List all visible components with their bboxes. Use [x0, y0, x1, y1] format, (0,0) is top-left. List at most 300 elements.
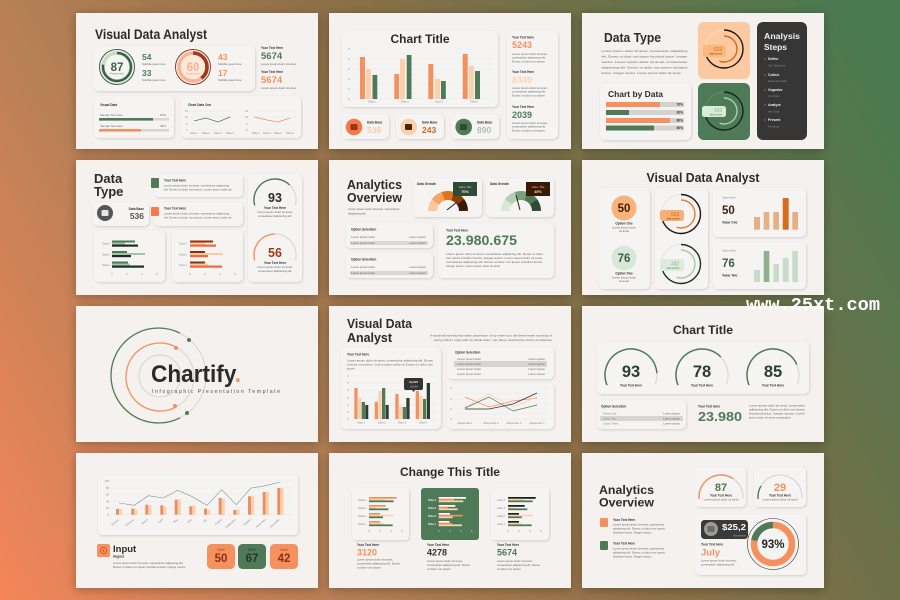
ring chart 60	[176, 50, 210, 84]
stats orange: Subtitle goes here	[218, 62, 242, 66]
dark value pill: $25,2	[722, 522, 746, 532]
gauge card 87: 87	[715, 482, 727, 494]
grouped bar chart: ut dolor non ipsum. Lorem ipsum dolor sit. Donec ut dolor non	[347, 362, 433, 366]
line charts: 15	[245, 109, 248, 113]
slide 4: Data Type gauges	[76, 160, 318, 295]
input text: Lorem ipsum dolor sit amet, consectetur adipiscing elit.	[113, 561, 184, 565]
gauge 85: Your Text Here	[762, 384, 784, 388]
value one bar card	[713, 188, 806, 237]
gauge 85	[739, 341, 807, 409]
donut chart 93%	[748, 518, 798, 570]
combo chart: March	[141, 517, 149, 525]
progress bars: 54%	[160, 124, 166, 128]
list item green	[600, 541, 665, 558]
slide 1: Visual Data Analyst	[76, 13, 318, 149]
panel: green bars	[94, 230, 165, 282]
combo chart: April	[157, 517, 164, 524]
grouped bar chart: 3	[347, 396, 349, 400]
grouped bar chart: Lorem ipsum dolor sit amet, consectetur adipiscing elit. Donec	[347, 358, 434, 362]
stat 2039: 2039	[512, 110, 532, 120]
option table: Option Selection	[601, 404, 626, 408]
july text: consectetur adipiscing elit.	[701, 562, 735, 566]
stat 4278: ut dolor non ipsum	[427, 567, 451, 571]
side numbers: 5674	[261, 51, 283, 62]
panel: analysis steps: the Objective	[768, 64, 786, 68]
orange horizontal bars: Data 3	[179, 242, 188, 246]
input text	[113, 544, 186, 569]
bar chart: 3	[348, 67, 350, 71]
paragraph: adipiscing elit. Donec ut dolor non ipsum tincidunt	[602, 66, 688, 70]
grouped bar chart: Data 3	[398, 420, 406, 424]
side numbers: Lorem ipsum dolor sit amet	[261, 86, 296, 90]
stats orange: 17	[218, 68, 228, 78]
option table: Lorem ipsum	[528, 372, 546, 376]
panel: green ring 342: data income	[709, 114, 723, 116]
stat 5243: Your Text Here	[512, 36, 534, 40]
panel: grouped bars	[341, 347, 441, 429]
panel: analysis steps: the Data	[768, 94, 780, 98]
value one bar card: Value One	[722, 220, 738, 224]
tile option 67: 67	[246, 553, 258, 565]
line chart: Responder 2	[484, 421, 499, 425]
stat 5674: Your Text Here	[497, 543, 519, 547]
stat card 243: Data Base	[422, 120, 438, 124]
slide 7: Chartify cover	[76, 306, 318, 442]
option table: Option One	[603, 412, 617, 416]
text card orange: Your Text Here	[164, 206, 186, 210]
option table: Lorem ipsum	[528, 367, 546, 371]
stats orange	[218, 52, 242, 82]
horizontal percent bars: 30%	[677, 110, 683, 114]
panel: peach ring 523: 523	[714, 47, 722, 53]
panel: orange bars	[172, 230, 243, 282]
panel: analysis steps: Relevant Data	[768, 79, 787, 83]
bar chart	[348, 47, 494, 104]
main number card: 23.980.675	[446, 233, 518, 248]
stat 5674: Lorem ipsum dolor sit amet,	[497, 559, 533, 563]
stat 2039	[512, 105, 548, 132]
heading: Lorem ipsum dolor sit amet, consectetur	[348, 207, 399, 211]
side paragraph	[749, 404, 806, 420]
text card green: Your Text Here	[164, 178, 186, 182]
stat 8349: Donec ut dolor non ipsum	[512, 93, 546, 97]
stat 2039: consectetur adipiscing elit.	[512, 125, 546, 129]
gauge card 29: Your Text Here	[769, 494, 791, 498]
bar card solid green: 0	[438, 529, 440, 533]
option card 1: Lorem ipsum dolor	[351, 241, 375, 245]
tile option 42: Option	[280, 548, 289, 552]
bar card orange green: 6	[401, 529, 403, 533]
bar chart: 5	[348, 47, 350, 51]
cover title: Chartify.	[151, 361, 241, 388]
stat card 243: 243	[422, 125, 436, 135]
stat card 536: 536	[130, 211, 144, 221]
list item green: Your Text Here	[613, 542, 635, 546]
panel: respondent rings	[93, 46, 255, 91]
heading: Overview	[599, 496, 655, 510]
panel: visual data bars	[94, 96, 174, 138]
gauge card orange: Data Growth	[417, 182, 436, 186]
main number card: Integer auctor. Lorem ipsum dolor sit amet	[446, 264, 500, 268]
stat 4278: consectetur adipiscing elit. Donec	[427, 563, 471, 567]
gauge card green: Value Title	[532, 185, 545, 189]
heading: Analytics	[599, 483, 654, 497]
horizontal percent bars	[606, 90, 684, 130]
bar card dark: Data 4	[497, 498, 506, 502]
gauge 56: 56	[268, 246, 282, 260]
intro text: A wonderful serenity has taken possession of my entire soul, like these sweet mornings of	[430, 334, 552, 338]
line charts: Data 4	[286, 131, 294, 135]
slide 11: Change This Title	[329, 453, 571, 588]
bar card orange green	[352, 488, 409, 540]
stats green: 33	[142, 68, 152, 78]
heading: Chart Title	[673, 325, 733, 337]
stat card 536	[342, 114, 389, 139]
horizontal percent bars: 80%	[677, 118, 683, 122]
line chart: 0	[450, 417, 452, 421]
stat 3120: Lorem ipsum dolor sit amet,	[357, 558, 393, 562]
line charts: 5	[246, 122, 248, 126]
option card 1	[346, 223, 433, 248]
stat 4278: Lorem ipsum dolor sit amet,	[427, 559, 463, 563]
option card 1: Lorem ipsum dolor	[351, 235, 375, 239]
stat 2039: Lorem ipsum dolor sit amet,	[512, 121, 548, 125]
tile option 50: Option	[217, 548, 226, 552]
stat 3120: Your Text Here	[357, 543, 379, 547]
bar card solid green: 6	[471, 529, 473, 533]
side paragraph: tincidunt luctus. Integer auctor. Lorem	[749, 412, 806, 416]
stat 8349: Lorem ipsum dolor sit amet,	[512, 86, 548, 90]
ring charts card: data income	[666, 267, 680, 270]
bar card orange green: Data 3	[358, 506, 367, 510]
stat card 890	[451, 114, 499, 139]
line charts: 0	[186, 128, 188, 132]
heading: Analytics	[347, 178, 402, 192]
combo chart: June	[186, 517, 193, 524]
list item orange: Lorem ipsum dolor sit amet, consectetur	[613, 522, 664, 526]
bar chart: 4	[348, 57, 350, 61]
progress bars: Sample Text Here	[100, 113, 123, 117]
line charts: 10	[185, 115, 188, 119]
line charts: 0	[246, 128, 248, 132]
stat 8349: 8349	[512, 75, 532, 85]
gauge card green: 45%	[534, 190, 542, 194]
gauge 93: Your Text Here	[620, 384, 642, 388]
stats green: Subtitle goes here	[142, 78, 166, 82]
option table: Option Three	[603, 422, 619, 426]
green horizontal bars: 0	[111, 272, 113, 276]
stat 4278: Your Text Here	[427, 543, 449, 547]
heading: Type	[94, 184, 123, 199]
intro text	[430, 334, 552, 342]
line charts: Data 2	[263, 131, 271, 135]
panel: peach ring 523: data income	[709, 52, 723, 56]
list item orange: tincidunt luctus. Integer auctor	[613, 530, 652, 534]
input text: August	[113, 554, 125, 558]
heading: Visual Data Analyst	[646, 171, 760, 185]
line charts: Chart Data One	[188, 103, 211, 107]
ring charts card: 523	[671, 212, 679, 218]
tooltip: Up105	[409, 380, 418, 384]
option table: Lorem ipsum	[528, 357, 546, 361]
bar card solid green	[421, 488, 479, 540]
stat 5243: Donec ut dolor non ipsum	[512, 59, 546, 63]
line chart: 6	[450, 386, 452, 390]
combo chart: 20	[106, 506, 110, 510]
stat 2039: Donec ut dolor non ipsum	[512, 128, 546, 132]
tile option 50: 50	[215, 553, 227, 565]
bar card dark: 4	[529, 529, 531, 533]
green horizontal bars: Data 1	[102, 263, 111, 267]
number 23.980: Your Text Here	[698, 404, 720, 408]
combo chart: 80	[106, 486, 110, 490]
heading: Chart Title	[390, 34, 450, 46]
value one bar card: 50	[722, 205, 735, 217]
cover subtitle: Infographic Presentation Template	[152, 389, 280, 395]
panel: combo chart	[98, 475, 298, 535]
green horizontal bars: 4	[141, 272, 143, 276]
option table	[597, 400, 686, 429]
line charts: 10	[245, 115, 248, 119]
main number card: consectetur adipiscing elit. Donec ut dolor non ipsum tincidunt luctus.	[446, 260, 543, 264]
panel: analysis steps: Steps	[764, 42, 787, 52]
option circles card: 76	[618, 253, 630, 265]
gauge 78: 78	[693, 363, 711, 381]
donut chart 93%: 93%	[761, 539, 785, 551]
value two bar card: 76	[722, 258, 735, 270]
option card 2: Lorem ipsum	[409, 271, 427, 275]
text card green	[151, 174, 243, 197]
bar card dark: Data 1	[497, 522, 506, 526]
gauge 93: Your Text Here	[264, 206, 286, 210]
stat 8349: Your Text Here	[512, 70, 534, 74]
heading: adipiscing elit.	[348, 212, 366, 216]
gauge card 87: Your Text Here	[710, 494, 732, 498]
panel: analysis steps: Collect	[768, 73, 780, 77]
side numbers	[261, 46, 296, 90]
stat 5243: consectetur adipiscing elit.	[512, 56, 546, 60]
option table: Lorem ipsum	[663, 422, 681, 426]
progress bars	[99, 103, 169, 132]
line charts: 15	[185, 109, 188, 113]
list item orange	[600, 518, 665, 534]
panel: analysis steps: Organize	[768, 88, 783, 92]
option table: Lorem ipsum dolor	[457, 362, 481, 366]
gauge card green	[486, 178, 554, 233]
bar card orange green: 4	[390, 529, 392, 533]
gauge 93	[249, 174, 301, 226]
bar card dark: 6	[540, 529, 542, 533]
option table: Lorem ipsum dolor	[457, 372, 481, 376]
slide 5: Analytics Overview	[329, 160, 571, 295]
combo chart	[105, 479, 292, 529]
main number card: Lorem ipsum dolor sit amet, consectetur adipiscing elit. Donec ut dolor	[446, 252, 543, 256]
orange horizontal bars: 2	[204, 272, 206, 276]
stat 5674: 5674	[497, 548, 517, 558]
panel: chart by data	[600, 83, 691, 140]
bar card solid green: 2	[449, 529, 451, 533]
gauge 93: 93	[268, 191, 282, 205]
gauge 56: Your Text Here	[264, 261, 286, 265]
combo chart: 100	[105, 479, 110, 483]
combo chart: November	[255, 518, 267, 528]
ring charts card: data income	[666, 218, 680, 220]
value two bar card: Value Two	[722, 274, 737, 278]
gauge 93: Lorem ipsum dolor sit amet,	[257, 210, 293, 214]
stat 4278	[427, 543, 471, 571]
stat card 890: 890	[477, 125, 491, 135]
grouped bar chart: Data 1	[357, 420, 365, 424]
line charts: 5	[186, 122, 188, 126]
gauge 93: 93	[622, 363, 640, 381]
option circles card: Lorem ipsum dolor	[612, 226, 636, 230]
option circles card	[599, 188, 650, 289]
gauge 85: 85	[764, 363, 782, 381]
orange horizontal bars: 6	[234, 272, 236, 276]
bar card solid green: 4	[460, 529, 462, 533]
stat 8349: consectetur adipiscing elit.	[512, 90, 546, 94]
bar card orange green: Data 4	[358, 498, 367, 502]
panel: analysis steps: the Data	[768, 110, 780, 114]
stats orange: Subtitle goes here	[218, 78, 242, 82]
gauge 78	[668, 341, 736, 409]
option card 1: Lorem ipsum	[409, 241, 427, 245]
main number card	[438, 223, 554, 278]
gauge card 29: Lorem ipsum dolor sit amet	[763, 498, 798, 502]
gauge card orange: 70%	[461, 190, 469, 194]
ring chart 87	[100, 50, 134, 84]
paragraph: auctor. Lorem ipsum dolor sit amet, consectetur	[602, 60, 688, 64]
number 23.980	[698, 404, 742, 424]
option card 1: Lorem ipsum	[409, 235, 427, 239]
bar card dark: Data 2	[497, 514, 506, 518]
bar card solid green: Data 2	[428, 514, 437, 518]
line charts: Data 3	[214, 131, 222, 135]
line charts: Data 4	[226, 131, 234, 135]
july text: Your Text Here	[701, 542, 723, 546]
option circles card: sit amet	[619, 229, 629, 233]
bar chart: 1	[348, 87, 350, 91]
bar chart: Data 2	[401, 100, 409, 104]
heading: Overview	[347, 191, 402, 205]
stat 3120: ut dolor non ipsum	[357, 566, 381, 570]
bar card dark: Data 3	[497, 506, 506, 510]
option card 2: Lorem ipsum dolor	[351, 265, 375, 269]
value one bar card: Option Here	[722, 196, 737, 200]
option table: Lorem ipsum	[663, 412, 681, 416]
tooltip: +18.0M	[409, 386, 418, 388]
grouped bar chart: ipsum	[347, 366, 355, 370]
option circles card: Option Two	[615, 272, 633, 276]
paragraph: elit. Donec ut dolor non ipsum tincidunt luctus. Integer	[602, 54, 688, 58]
tile option 67: Option	[248, 548, 257, 552]
bar chart: 0	[348, 97, 350, 101]
side paragraph: adipiscing elit. Donec ut dolor non ipsum	[749, 408, 806, 412]
stats green	[142, 52, 166, 82]
orange horizontal bars: Data 1	[179, 263, 188, 267]
line chart: 4	[450, 397, 452, 401]
grouped bar chart	[347, 352, 436, 424]
orange horizontal bars: Data 2	[179, 252, 188, 256]
concentric rings	[95, 312, 222, 439]
panel: chart data one	[181, 96, 301, 138]
combo chart: January	[110, 517, 120, 527]
gauge 56	[249, 229, 301, 281]
option card 2	[346, 253, 433, 278]
bar card orange green: 0	[368, 529, 370, 533]
text card green: elit. Donec ut dolor non ipsum. Lorem ipsum dolor sit	[164, 188, 232, 192]
gauge card 29: 29	[774, 482, 786, 494]
green horizontal bars	[102, 240, 158, 276]
option table: Option Two	[603, 416, 617, 420]
text card orange: Lorem ipsum dolor sit amet, consectetur adipiscing	[164, 212, 229, 216]
option circles card: Option One	[615, 222, 633, 226]
ring chart 60: Responder	[186, 72, 200, 76]
stat card 536: Data Base	[129, 207, 144, 211]
paragraph: luctus. Integer auctor. Lorem ipsum dolor sit amet.	[602, 71, 682, 75]
combo chart: December	[269, 518, 281, 528]
panel: analysis steps: Analysis	[764, 31, 800, 41]
panel: analysis steps: Define	[768, 57, 778, 61]
gauge card 87: Lorem ipsum dolor sit amet	[704, 498, 739, 502]
option table: Lorem ipsum	[663, 416, 681, 420]
grouped bar chart: Data 2	[378, 420, 386, 424]
panel: three gauges	[597, 342, 809, 394]
combo chart: August	[214, 518, 223, 526]
stat card 536	[93, 202, 149, 226]
bar card dark: 0	[507, 529, 509, 533]
bar card solid green: Data 1	[428, 522, 437, 526]
grouped bar chart: Data 4	[419, 420, 427, 424]
horizontal percent bars: 70%	[677, 102, 683, 106]
line charts: Data 1	[190, 131, 198, 135]
option table: Lorem ipsum dolor	[457, 367, 481, 371]
gauge 78: Your Text Here	[691, 384, 713, 388]
panel: green ring 342	[698, 83, 750, 140]
text card green: Lorem ipsum dolor sit amet, consectetur adipiscing	[164, 184, 229, 188]
number 23.980: 23.980	[698, 409, 742, 424]
value two bar card: Option Here	[722, 248, 737, 252]
line chart: Responder 4	[530, 421, 545, 425]
stat 3120	[357, 543, 401, 570]
panel: green ring 342: 342	[714, 108, 722, 114]
heading	[347, 178, 402, 216]
slide 2: Chart Title	[329, 13, 571, 149]
option circles card: 50	[618, 203, 630, 215]
heading	[599, 483, 655, 510]
stat 5243	[512, 36, 548, 63]
option card 1: Option Selection	[351, 228, 376, 232]
list item orange: adipiscing elit. Donec ut dolor non ipsum	[613, 526, 665, 530]
bar chart: Data 4	[470, 100, 478, 104]
combo chart: May	[172, 517, 179, 524]
heading: Change This Title	[400, 467, 500, 479]
grouped bar chart: 1	[347, 410, 349, 414]
stat 8349	[512, 70, 548, 97]
dark value pill	[701, 520, 748, 539]
ring chart 87: 87	[111, 62, 123, 74]
gauge card green: Data Growth	[490, 182, 509, 186]
list item green: adipiscing elit. Donec ut dolor non ipsum	[613, 550, 665, 554]
july text	[701, 542, 737, 566]
orange horizontal bars: 4	[219, 272, 221, 276]
side numbers: Lorem ipsum dolor sit amet	[261, 62, 296, 66]
bar card solid green: Data 4	[428, 498, 437, 502]
option table: Lorem ipsum	[528, 362, 546, 366]
gauge 93: consectetur adipiscing elit.	[258, 214, 292, 218]
horizontal percent bars: Chart by Data	[608, 90, 664, 99]
option card 2: Lorem ipsum dolor	[351, 271, 375, 275]
